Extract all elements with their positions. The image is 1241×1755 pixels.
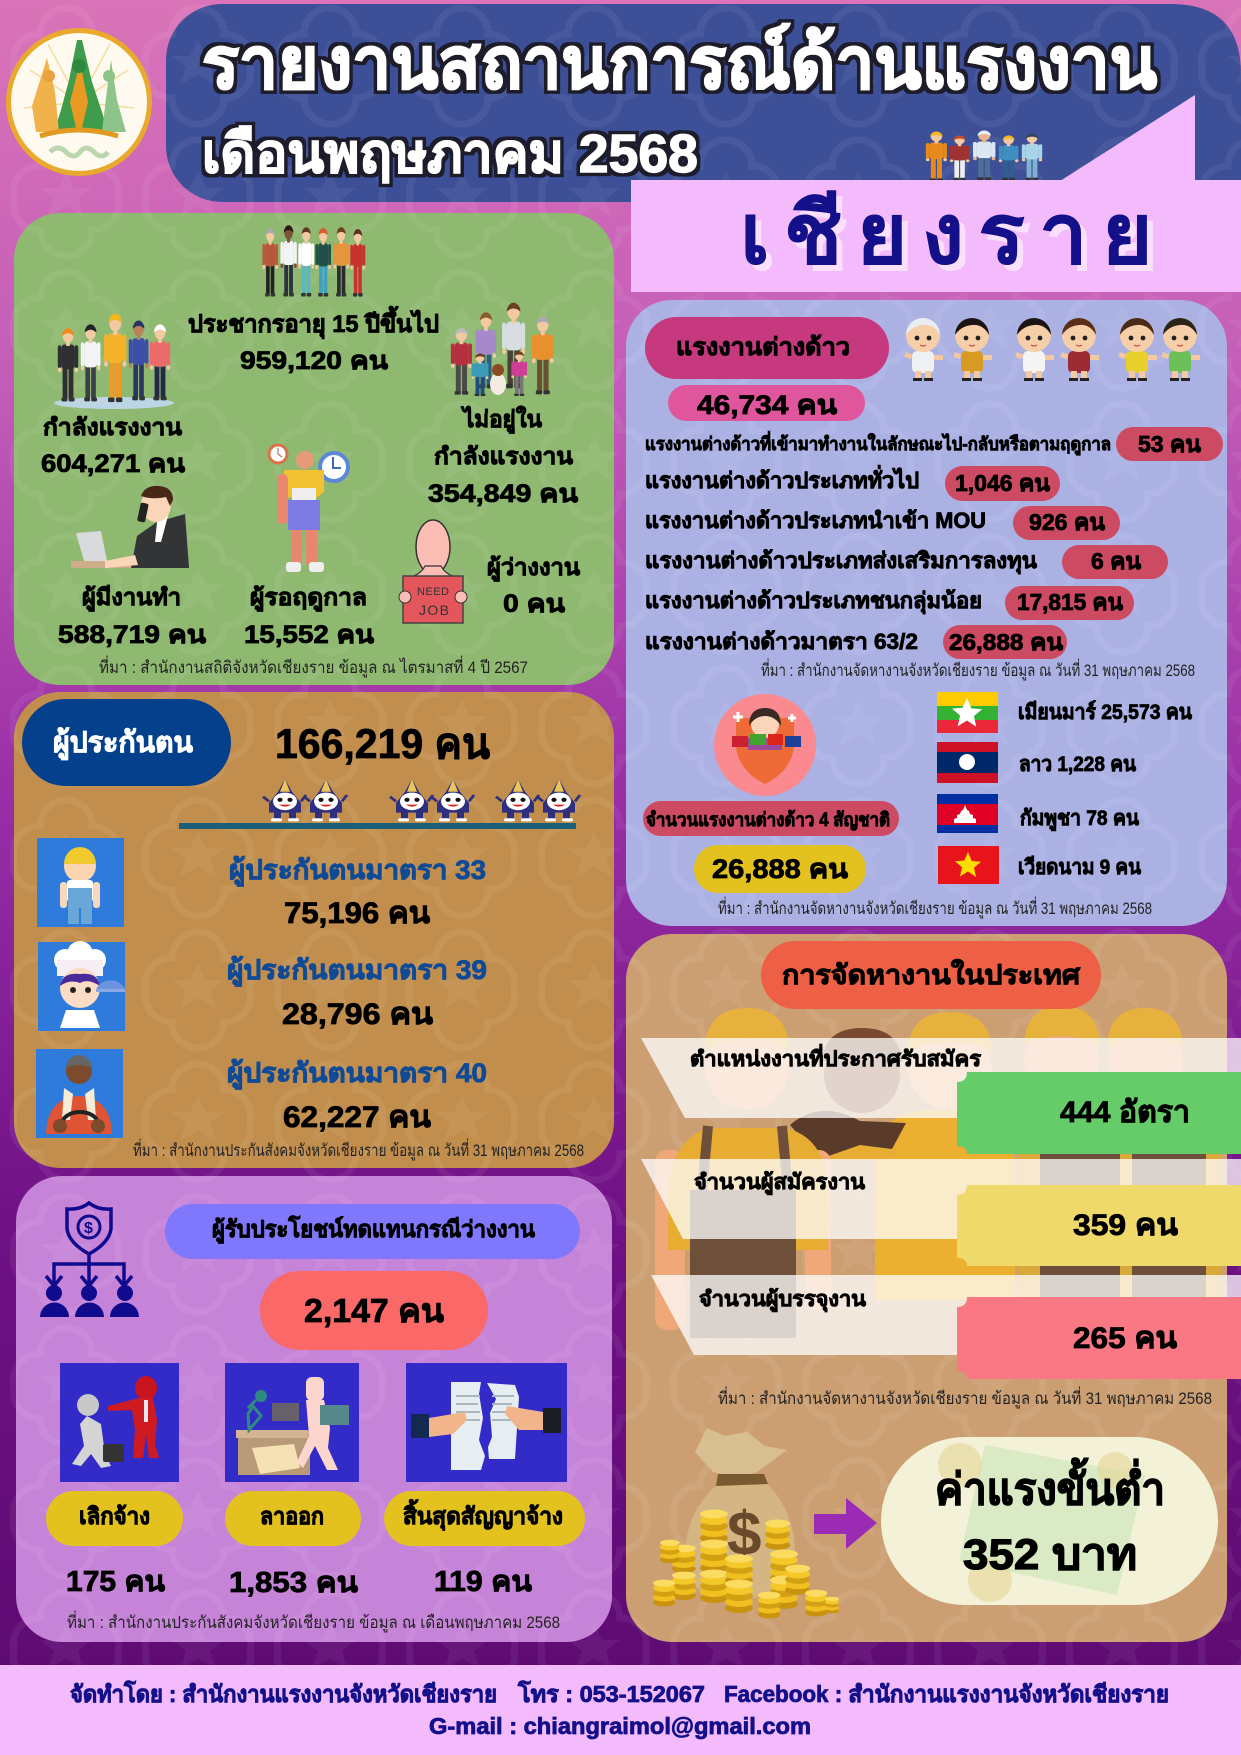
value box: placements	[957, 1297, 1241, 1379]
icon: need job person: JOB	[419, 602, 449, 618]
province name banner	[631, 95, 1241, 292]
row: ethnic minority: แรงงานต่างด้าวประเภทชนกลุ่มน้อย	[645, 588, 982, 615]
label: placements: จำนวนผู้บรรจุงาน	[699, 1287, 867, 1313]
icon: workers group in header	[926, 131, 1042, 181]
panel: population	[14, 213, 614, 685]
panel: insured persons	[14, 692, 614, 1168]
value: labour force: 604,271 คน	[41, 450, 185, 478]
row: seasonal border workers: 53 คน	[1138, 431, 1201, 457]
icon: family	[451, 303, 554, 396]
value: seasonal: 15,552 คน	[244, 621, 374, 649]
value: total insured: 166,219 คน	[275, 720, 490, 767]
illustration: torn contract	[406, 1363, 567, 1482]
icon: seasonal worker with clocks	[269, 445, 348, 572]
value: employed: 588,719 คน	[58, 621, 206, 649]
row: MOU: 926 คน	[1029, 509, 1105, 535]
row: section 63/2: แรงงานต่างด้าวมาตรา 63/2	[645, 629, 918, 654]
label: section 39: ผู้ประกันตนมาตรา 39	[227, 955, 487, 987]
minimum wage pill	[881, 1437, 1218, 1605]
value: population: 959,120 คน	[240, 347, 388, 375]
header banner	[166, 4, 1241, 202]
label: Vietnam: เวียดนาม 9 คน	[1018, 855, 1142, 879]
heading pill: ผู้ประกันตน	[53, 727, 193, 760]
label: not in labour force	[434, 405, 573, 469]
label: applicants: จำนวนผู้สมัครงาน	[694, 1170, 866, 1196]
label: not in labour force: กำลังแรงงาน	[434, 443, 573, 469]
flag: Myanmar	[937, 692, 998, 733]
province name: เชียงราย	[740, 187, 1167, 281]
value: resigned: 1,853 คน	[229, 1567, 358, 1599]
label: not in labour force: ไม่อยู่ใน	[460, 405, 542, 434]
label: section 40: ผู้ประกันตนมาตรา 40	[227, 1058, 487, 1090]
icon: need job person	[399, 520, 467, 623]
label: labour force: กำลังแรงงาน	[43, 414, 182, 440]
panel: unemployment benefit	[16, 1176, 612, 1642]
value box: placements: 265 คน	[1073, 1322, 1178, 1355]
row: investment promotion	[645, 545, 1168, 579]
value box: applicants	[957, 1185, 1241, 1266]
heading pill	[645, 317, 889, 379]
label: Cambodia: กัมพูชา 78 คน	[1020, 807, 1140, 832]
source note: ที่มา : สำนักงานสถิติจังหวัดเชียงราย ข้อมูล ณ ไตรมาสที่ 4 ปี 2567	[99, 655, 528, 678]
row: ethnic minority	[645, 586, 1134, 620]
total pill	[668, 385, 865, 421]
pill: contract ended: สิ้นสุดสัญญาจ้าง	[403, 1499, 563, 1531]
row: investment promotion: แรงงานต่างด้าวประเภทส่งเสริมการลงทุน	[645, 548, 1037, 575]
label: vacancies: ตำแหน่งงานที่ประกาศรับสมัคร	[690, 1043, 982, 1071]
row: MOU: แรงงานต่างด้าวประเภทนำเข้า MOU	[645, 508, 986, 533]
value: dismissed: 175 คน	[66, 1566, 165, 1598]
label: section 33: ผู้ประกันตนมาตรา 33	[229, 855, 486, 887]
pill: dismissed	[46, 1491, 183, 1546]
icon: section 39 chef	[38, 941, 125, 1031]
arrow	[814, 1498, 877, 1549]
footer: phone: โทร : 053-152067	[517, 1680, 705, 1707]
subtitle: month: เดือนพฤษภาคม 2568	[202, 124, 698, 184]
icon: group of people	[262, 225, 365, 297]
icon: need job person: NEED	[417, 586, 449, 598]
icon: four nationalities badge	[714, 694, 816, 796]
footer: email: G-mail : chiangraimol@gmail.com	[429, 1713, 811, 1739]
footer	[0, 1665, 1241, 1755]
title: รายงานสถานการณ์ด้านแรงงาน	[202, 23, 1157, 104]
total pill: 2,147 คน	[304, 1292, 444, 1329]
heading pill: แรงงานต่างด้าว	[676, 334, 850, 361]
icon: employed businessman	[71, 486, 189, 568]
icon: labour force workers	[54, 314, 174, 409]
row: general: แรงงานต่างด้าวประเภททั่วไป	[645, 464, 919, 493]
flag: Laos	[937, 742, 998, 783]
icon: benefit distribution	[40, 1203, 139, 1317]
total pill: 46,734 คน	[697, 390, 838, 420]
value: minimum wage: 352 บาท	[963, 1531, 1137, 1579]
label: seasonal: ผู้รอฤดูกาล	[250, 584, 367, 612]
heading pill	[165, 1204, 580, 1259]
pill: four nationalities total	[694, 845, 866, 893]
flag: Vietnam	[938, 846, 999, 884]
row: section 63/2: 26,888 คน	[949, 629, 1063, 655]
pill: four nationalities total: 26,888 คน	[712, 854, 849, 884]
pill: dismissed: เลิกจ้าง	[79, 1503, 150, 1529]
illustration: dismissal	[60, 1363, 179, 1482]
row: section 63/2	[645, 625, 1067, 659]
label: Laos: ลาว 1,228 คน	[1019, 753, 1137, 776]
total pill	[260, 1271, 488, 1350]
icon: mascots	[263, 779, 580, 821]
pill: contract ended	[384, 1491, 585, 1546]
value: section 40: 62,227 คน	[283, 1101, 432, 1134]
panel: foreign workers	[626, 300, 1227, 926]
pill: resigned: ลาออก	[260, 1503, 324, 1529]
flag: Cambodia	[937, 794, 998, 833]
value: section 33: 75,196 คน	[284, 897, 431, 930]
label: Myanmar: เมียนมาร์ 25,573 คน	[1018, 700, 1193, 724]
value box: vacancies: 444 อัตรา	[1060, 1096, 1190, 1129]
label: population 15+: ประชากรอายุ 15 ปีขึ้นไป	[188, 305, 439, 340]
label: minimum wage: ค่าแรงขั้นต่ำ	[935, 1457, 1165, 1514]
divider bar	[179, 823, 576, 829]
row: ethnic minority: 17,815 คน	[1017, 589, 1123, 615]
icon: money bag and coins	[653, 1428, 839, 1618]
pill: four nationalities	[643, 801, 899, 836]
illustration: background workers	[655, 1006, 1222, 1338]
source note: ที่มา : สำนักงานประกันสังคมจังหวัดเชียงราย ข้อมูล ณ วันที่ 31 พฤษภาคม 2568	[133, 1138, 584, 1161]
pill: resigned	[225, 1491, 361, 1546]
heading pill: การจัดหางานในประเทศ	[782, 959, 1081, 990]
icon: six cartoon nationals	[904, 318, 1200, 381]
row: seasonal border workers: แรงงานต่างด้าวที่เข้ามาทำงานในลักษณะไป-กลับหรือตามฤดูกาล	[645, 431, 1111, 456]
icon: benefit distribution: $	[84, 1220, 93, 1237]
row: investment promotion: 6 คน	[1091, 548, 1141, 574]
band: applicants	[641, 1159, 1241, 1239]
pill: four nationalities: จำนวนแรงงานต่างด้าว 4 สัญชาติ	[646, 809, 890, 831]
icon: section 33 worker	[37, 838, 124, 927]
footer: organisation: จัดทำโดย : สำนักงานแรงงานจังหวัดเชียงราย	[70, 1680, 497, 1707]
row: MOU	[645, 506, 1120, 540]
value box: applicants: 359 คน	[1073, 1209, 1179, 1242]
value box: vacancies	[957, 1072, 1241, 1154]
footer: facebook: Facebook : สำนักงานแรงงานจังหวัดเชียงราย	[724, 1681, 1169, 1707]
value: unemployed: 0 คน	[503, 590, 565, 618]
icon: section 40 driver	[36, 1049, 123, 1138]
label: unemployed: ผู้ว่างงาน	[487, 554, 580, 582]
source note: ที่มา : สำนักงานประกันสังคมจังหวัดเชียงราย ข้อมูล ณ เดือนพฤษภาคม 2568	[67, 1610, 560, 1633]
icon: money bag and coins: $	[727, 1500, 761, 1569]
value: section 39: 28,796 คน	[282, 998, 434, 1031]
heading pill	[22, 699, 231, 786]
band: placements	[651, 1275, 1241, 1355]
row: general: 1,046 คน	[955, 470, 1050, 496]
value: not in labour force: 354,849 คน	[428, 480, 578, 508]
logo: provincial seal	[6, 28, 152, 176]
heading pill: ผู้รับประโยชน์ทดแทนกรณีว่างงาน	[212, 1215, 535, 1244]
heading pill	[761, 941, 1101, 1009]
band: vacancies	[641, 1038, 1241, 1118]
value: contract ended: 119 คน	[434, 1566, 532, 1598]
illustration: resignation	[225, 1363, 359, 1482]
row: general	[645, 464, 1060, 501]
row: seasonal border workers	[645, 427, 1223, 461]
panel: domestic job placement	[626, 934, 1241, 1642]
label: employed: ผู้มีงานทำ	[82, 584, 181, 612]
